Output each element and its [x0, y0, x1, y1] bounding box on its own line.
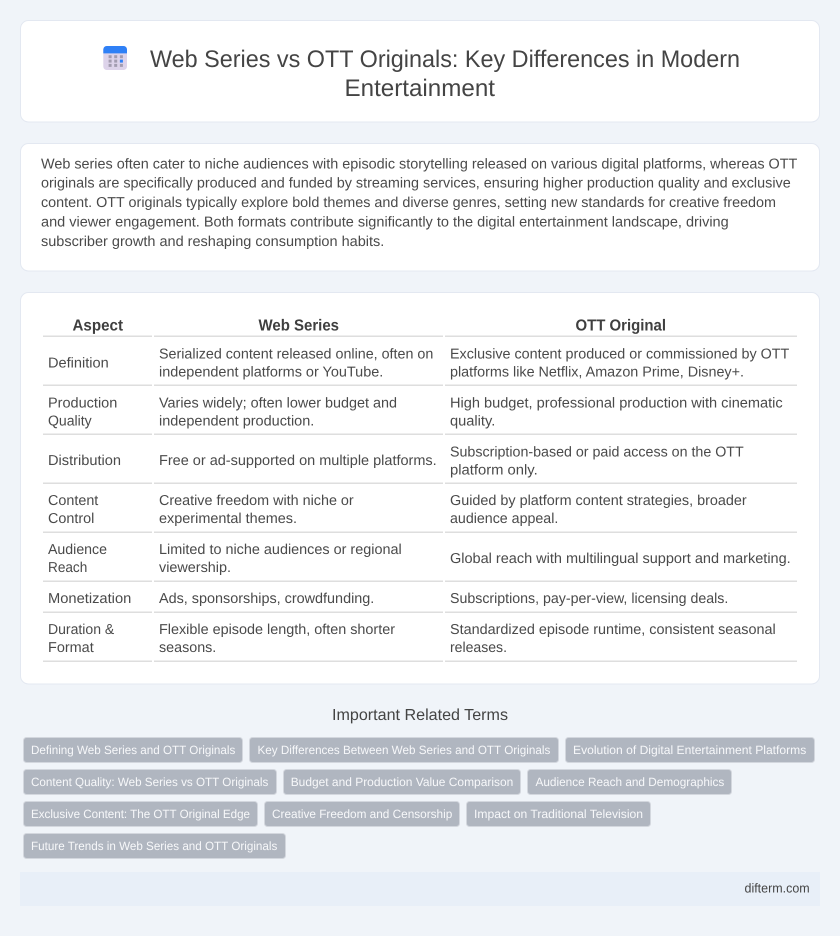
table header: OTT Original — [576, 318, 666, 335]
tag: Budget and Production Value Comparison — [291, 775, 513, 789]
table row: Audience Reach: Audience — [48, 542, 107, 558]
tag — [250, 738, 558, 762]
tag: Creative Freedom and Censorship — [272, 807, 453, 821]
table row: Audience Reach: Global reach with multilingual support and marketing. — [450, 551, 791, 567]
icon: calendar — [103, 46, 127, 70]
tag — [566, 738, 814, 762]
table row: Monetization — [43, 591, 797, 613]
tag: Exclusive Content: The OTT Original Edge — [31, 807, 250, 821]
table row: Audience Reach — [43, 542, 797, 582]
tag: Key Differences Between Web Series and OTT Originals — [258, 743, 550, 757]
tag — [24, 834, 286, 858]
table row: Content Control: audience appeal. — [450, 511, 558, 527]
tag — [264, 802, 460, 826]
table row: Duration and Format: releases. — [450, 640, 507, 656]
text block: introduction: and viewer engagement. Both formats contribute significantly to the digital entertainment landscape, driving — [41, 215, 729, 231]
text block: introduction — [41, 156, 798, 250]
table row: Audience Reach: Limited to niche audiences or regional — [159, 542, 402, 558]
table row: Definition: platforms like Netflix, Amazon Prime, Disney+. — [450, 364, 744, 380]
panel: comparison table card — [20, 292, 820, 684]
panel: intro text card — [20, 144, 820, 271]
tag — [284, 770, 520, 794]
tag: Content Quality: Web Series vs OTT Originals — [31, 775, 268, 789]
table row: Definition: independent platforms or YouTube. — [159, 364, 383, 380]
tag: Audience Reach and Demographics — [536, 775, 724, 789]
table row: Distribution: Free or ad-supported on multiple platforms. — [159, 453, 437, 469]
panel: title card — [20, 20, 820, 122]
panel: related terms tags — [24, 738, 814, 858]
text block: introduction: originals are specifically produced and funded by streaming services, ensuring higher production quality and exclusive — [41, 176, 791, 192]
table row: Content Control: experimental themes. — [159, 511, 297, 527]
table row: Content Control: Creative freedom with niche or — [159, 493, 354, 509]
tag: Evolution of Digital Entertainment Platforms — [573, 743, 806, 757]
table row: Duration and Format: Format — [48, 640, 94, 656]
table row: Production Quality: independent production. — [159, 413, 314, 429]
table row: Definition: Serialized content released online, often on — [159, 346, 433, 362]
tag — [24, 770, 276, 794]
table row: Duration and Format — [43, 622, 797, 662]
table row: Content Control: Content — [48, 493, 98, 509]
table row: Duration and Format: Duration & — [48, 622, 115, 638]
title — [150, 46, 740, 102]
footer — [20, 872, 820, 906]
table row: Content Control: Control — [48, 511, 94, 527]
title: Entertainment — [344, 75, 495, 102]
table row: Monetization: Monetization — [48, 591, 131, 607]
title: Web Series vs OTT Originals: Key Differences in Modern — [150, 46, 740, 73]
table row: Distribution: platform only. — [450, 463, 538, 479]
table row: Duration and Format: Flexible episode length, often shorter — [159, 622, 395, 638]
table row: Distribution — [43, 445, 797, 484]
table row: Definition: Exclusive content produced or commissioned by OTT — [450, 346, 789, 362]
table row: Production Quality: High budget, professional production with cinematic — [450, 395, 783, 411]
table row: Audience Reach: viewership. — [159, 560, 231, 576]
table row: Definition — [43, 346, 797, 386]
table row: Content Control — [43, 493, 797, 533]
footer: difterm.com — [744, 881, 810, 896]
table row: Distribution: Distribution — [48, 453, 121, 469]
tag: Future Trends in Web Series and OTT Originals — [31, 839, 277, 853]
text block: introduction: Web series often cater to niche audiences with episodic storytelling released on various digital platforms, whereas OTT — [41, 156, 798, 172]
text block: introduction: content. OTT originals typically explore bold themes and diverse genres, setting new standards for creative freedom — [41, 195, 776, 211]
table header: Aspect — [72, 318, 124, 335]
table row: Audience Reach: Reach — [48, 560, 87, 576]
table header: Web Series — [258, 318, 339, 335]
table header — [43, 318, 797, 337]
table row: Production Quality: Production — [48, 395, 117, 411]
table row: Duration and Format: Standardized episode runtime, consistent seasonal — [450, 622, 776, 638]
table row: Production Quality: Quality — [48, 413, 92, 429]
tag: Defining Web Series and OTT Originals — [31, 743, 235, 757]
tag — [466, 802, 650, 826]
tag — [528, 770, 732, 794]
tag: Impact on Traditional Television — [474, 807, 643, 821]
table row: Monetization: Subscriptions, pay-per-view, licensing deals. — [450, 591, 728, 607]
table row: Distribution: Subscription-based or paid access on the OTT — [450, 445, 744, 461]
table row: Production Quality — [43, 395, 797, 435]
table row: Production Quality: quality. — [450, 413, 495, 429]
heading: Important Related Terms: Important Related Terms — [332, 707, 508, 724]
table row: Production Quality: Varies widely; often lower budget and — [159, 395, 397, 411]
table row: Definition: Definition — [48, 355, 109, 371]
table row: Monetization: Ads, sponsorships, crowdfunding. — [159, 591, 374, 607]
tag — [24, 738, 242, 762]
table row: Content Control: Guided by platform content strategies, broader — [450, 493, 747, 509]
table row: Duration and Format: seasons. — [159, 640, 216, 656]
text block: introduction: subscriber growth and reshaping consumption habits. — [41, 234, 384, 250]
tag — [24, 802, 258, 826]
